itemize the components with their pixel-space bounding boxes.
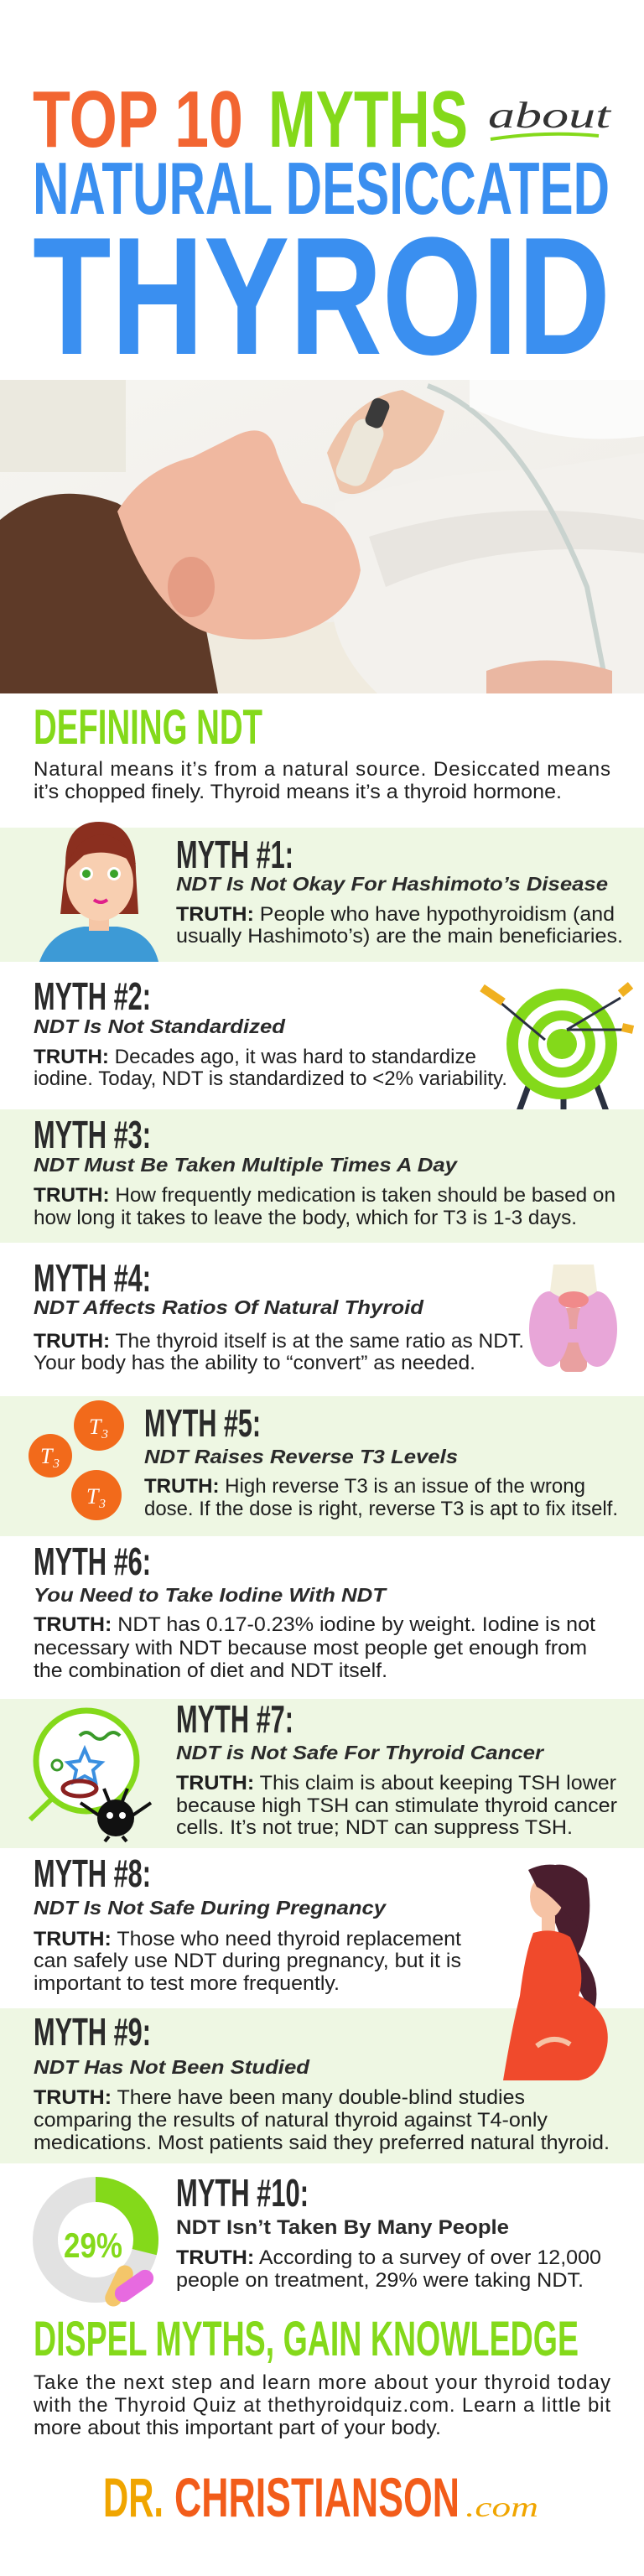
panel: myth 7: cells. It’s not true; NDT can suppress TSH. — [176, 1816, 573, 1839]
panel: myth 8: can safely use NDT during pregnancy, but it is — [34, 1950, 461, 1972]
panel: myth 6: necessary with NDT because most people get enough from — [34, 1637, 587, 1659]
panel: myth 3: how long it takes to leave the body, which for T3 is 1-3 days. — [34, 1207, 577, 1229]
icon: thyroid gland — [529, 1265, 617, 1372]
text: defining NDT body — [34, 758, 610, 803]
panel: myth 1 — [0, 822, 644, 962]
panel: myth 1: usually Hashimoto’s) are the main beneficiaries. — [176, 925, 623, 948]
panel: myth 10: TRUTH: According to a survey of over 12,000 — [176, 2246, 601, 2269]
panel: myth 7: TRUTH: This claim is about keeping TSH lower — [176, 1772, 616, 1794]
panel: myth 7: NDT is Not Safe For Thyroid Cancer — [176, 1742, 544, 1763]
panel: myth 9: TRUTH: There have been many double-blind studies — [34, 2086, 525, 2109]
panel: myth 3 — [0, 1109, 644, 1243]
panel: myth 3: NDT Must Be Taken Multiple Times A Day — [34, 1154, 458, 1176]
panel: myth 2: MYTH #2: — [34, 974, 151, 1018]
panel: myth 2 — [34, 974, 633, 1114]
panel: myth 6: TRUTH: NDT has 0.17-0.23% iodine by weight. Iodine is not — [34, 1613, 595, 1636]
chart: 29% donut with pills: 29% — [64, 2225, 122, 2265]
icon: target with arrows — [482, 985, 633, 1114]
panel: myth 4: NDT Affects Ratios Of Natural Thyroid — [34, 1296, 424, 1318]
panel: myth 9: MYTH #9: — [34, 2010, 151, 2054]
chart: 29% donut with pills — [45, 2189, 157, 2309]
panel: myth 7 — [0, 1697, 644, 1848]
panel: myth 5 — [0, 1396, 644, 1536]
panel: myth 2: iodine. Today, NDT is standardized to <2% variability. — [34, 1067, 507, 1090]
title — [33, 75, 613, 390]
panel: myth 5: dose. If the dose is right, reverse T3 is apt to fix itself. — [144, 1498, 618, 1520]
panel: myth 6: MYTH #6: — [34, 1540, 151, 1583]
panel: myth 2: NDT Is Not Standardized — [34, 1015, 286, 1037]
logo: DrChristianson.com: DR. — [103, 2466, 164, 2528]
title: about — [488, 95, 613, 136]
text: closing body: more about this important part of your body. — [34, 2417, 441, 2439]
panel: myth 10: MYTH #10: — [176, 2171, 309, 2215]
text: defining NDT body: it’s chopped finely. Thyroid means it’s a thyroid hormone. — [34, 781, 562, 803]
panel: myth 8 — [34, 1852, 461, 1995]
icon: T3 pills: T₃ — [40, 1444, 60, 1468]
panel: myth 8: NDT Is Not Safe During Pregnancy — [34, 1897, 387, 1919]
panel: myth 6: the combination of diet and NDT itself. — [34, 1659, 387, 1682]
title: TOP 10 — [33, 75, 243, 164]
panel: myth 9 — [0, 2008, 644, 2163]
panel: myth 4: TRUTH: The thyroid itself is at the same ratio as NDT. — [34, 1330, 524, 1353]
panel: myth 8: MYTH #8: — [34, 1852, 151, 1895]
panel: myth 1: TRUTH: People who have hypothyroidism (and — [176, 903, 615, 926]
panel: myth 7: MYTH #7: — [176, 1697, 293, 1741]
logo: DrChristianson.com: .com — [465, 2492, 538, 2523]
icon: woman avatar — [39, 822, 158, 962]
panel: myth 1: NDT Is Not Okay For Hashimoto’s Disease — [176, 873, 608, 895]
panel: myth 1: MYTH #1: — [176, 833, 293, 876]
panel: myth 2: TRUTH: Decades ago, it was hard to standardize — [34, 1046, 476, 1068]
heading: defining NDT: DEFINING NDT — [34, 700, 262, 755]
panel: myth 4 — [34, 1256, 617, 1374]
icon: pregnant woman — [503, 1865, 608, 2080]
text: closing body — [33, 2371, 610, 2439]
panel: myth 10: people on treatment, 29% were taking NDT. — [176, 2269, 584, 2292]
panel: myth 7: because high TSH can stimulate thyroid cancer — [176, 1794, 617, 1817]
icon: T3 pills — [29, 1400, 124, 1520]
panel: myth 10 — [45, 2171, 601, 2309]
panel: myth 9: comparing the results of natural thyroid against T4-only — [34, 2109, 548, 2132]
panel: myth 4: Your body has the ability to “convert” as needed. — [34, 1352, 475, 1374]
panel: myth 3: MYTH #3: — [34, 1113, 151, 1156]
text: closing body: Take the next step and learn more about your thyroid today — [34, 2371, 610, 2394]
panel: myth 9: NDT Has Not Been Studied — [34, 2056, 310, 2078]
photo: ultrasound exam — [0, 380, 644, 693]
icon: T3 pills: T₃ — [89, 1415, 109, 1439]
panel: myth 9: medications. Most patients said they preferred natural thyroid. — [34, 2132, 610, 2154]
logo: DrChristianson.com: CHRISTIANSON — [174, 2466, 460, 2528]
panel: myth 5: MYTH #5: — [144, 1401, 261, 1445]
panel: myth 3: TRUTH: How frequently medication is taken should be based on — [34, 1184, 615, 1207]
panel: myth 8: important to test more frequently. — [34, 1972, 340, 1995]
icon: T3 pills: T₃ — [86, 1484, 106, 1509]
text: defining NDT body: Natural means it’s from a natural source. Desiccated means — [34, 758, 610, 781]
panel: myth 6 — [34, 1540, 595, 1682]
panel: myth 8: TRUTH: Those who need thyroid replacement — [34, 1928, 461, 1950]
icon: magnifier with germs — [30, 1711, 151, 1841]
text: closing body: with the Thyroid Quiz at thethyroidquiz.com. Learn a little bit — [33, 2394, 610, 2417]
panel: myth 4: MYTH #4: — [34, 1256, 151, 1300]
title: MYTHS — [268, 75, 468, 164]
panel: myth 5: NDT Raises Reverse T3 Levels — [144, 1446, 458, 1467]
panel: myth 6: You Need to Take Iodine With NDT — [34, 1584, 387, 1606]
panel: myth 5: TRUTH: High reverse T3 is an issue of the wrong — [144, 1475, 585, 1498]
panel: myth 10: NDT Isn’t Taken By Many People — [176, 2216, 509, 2239]
